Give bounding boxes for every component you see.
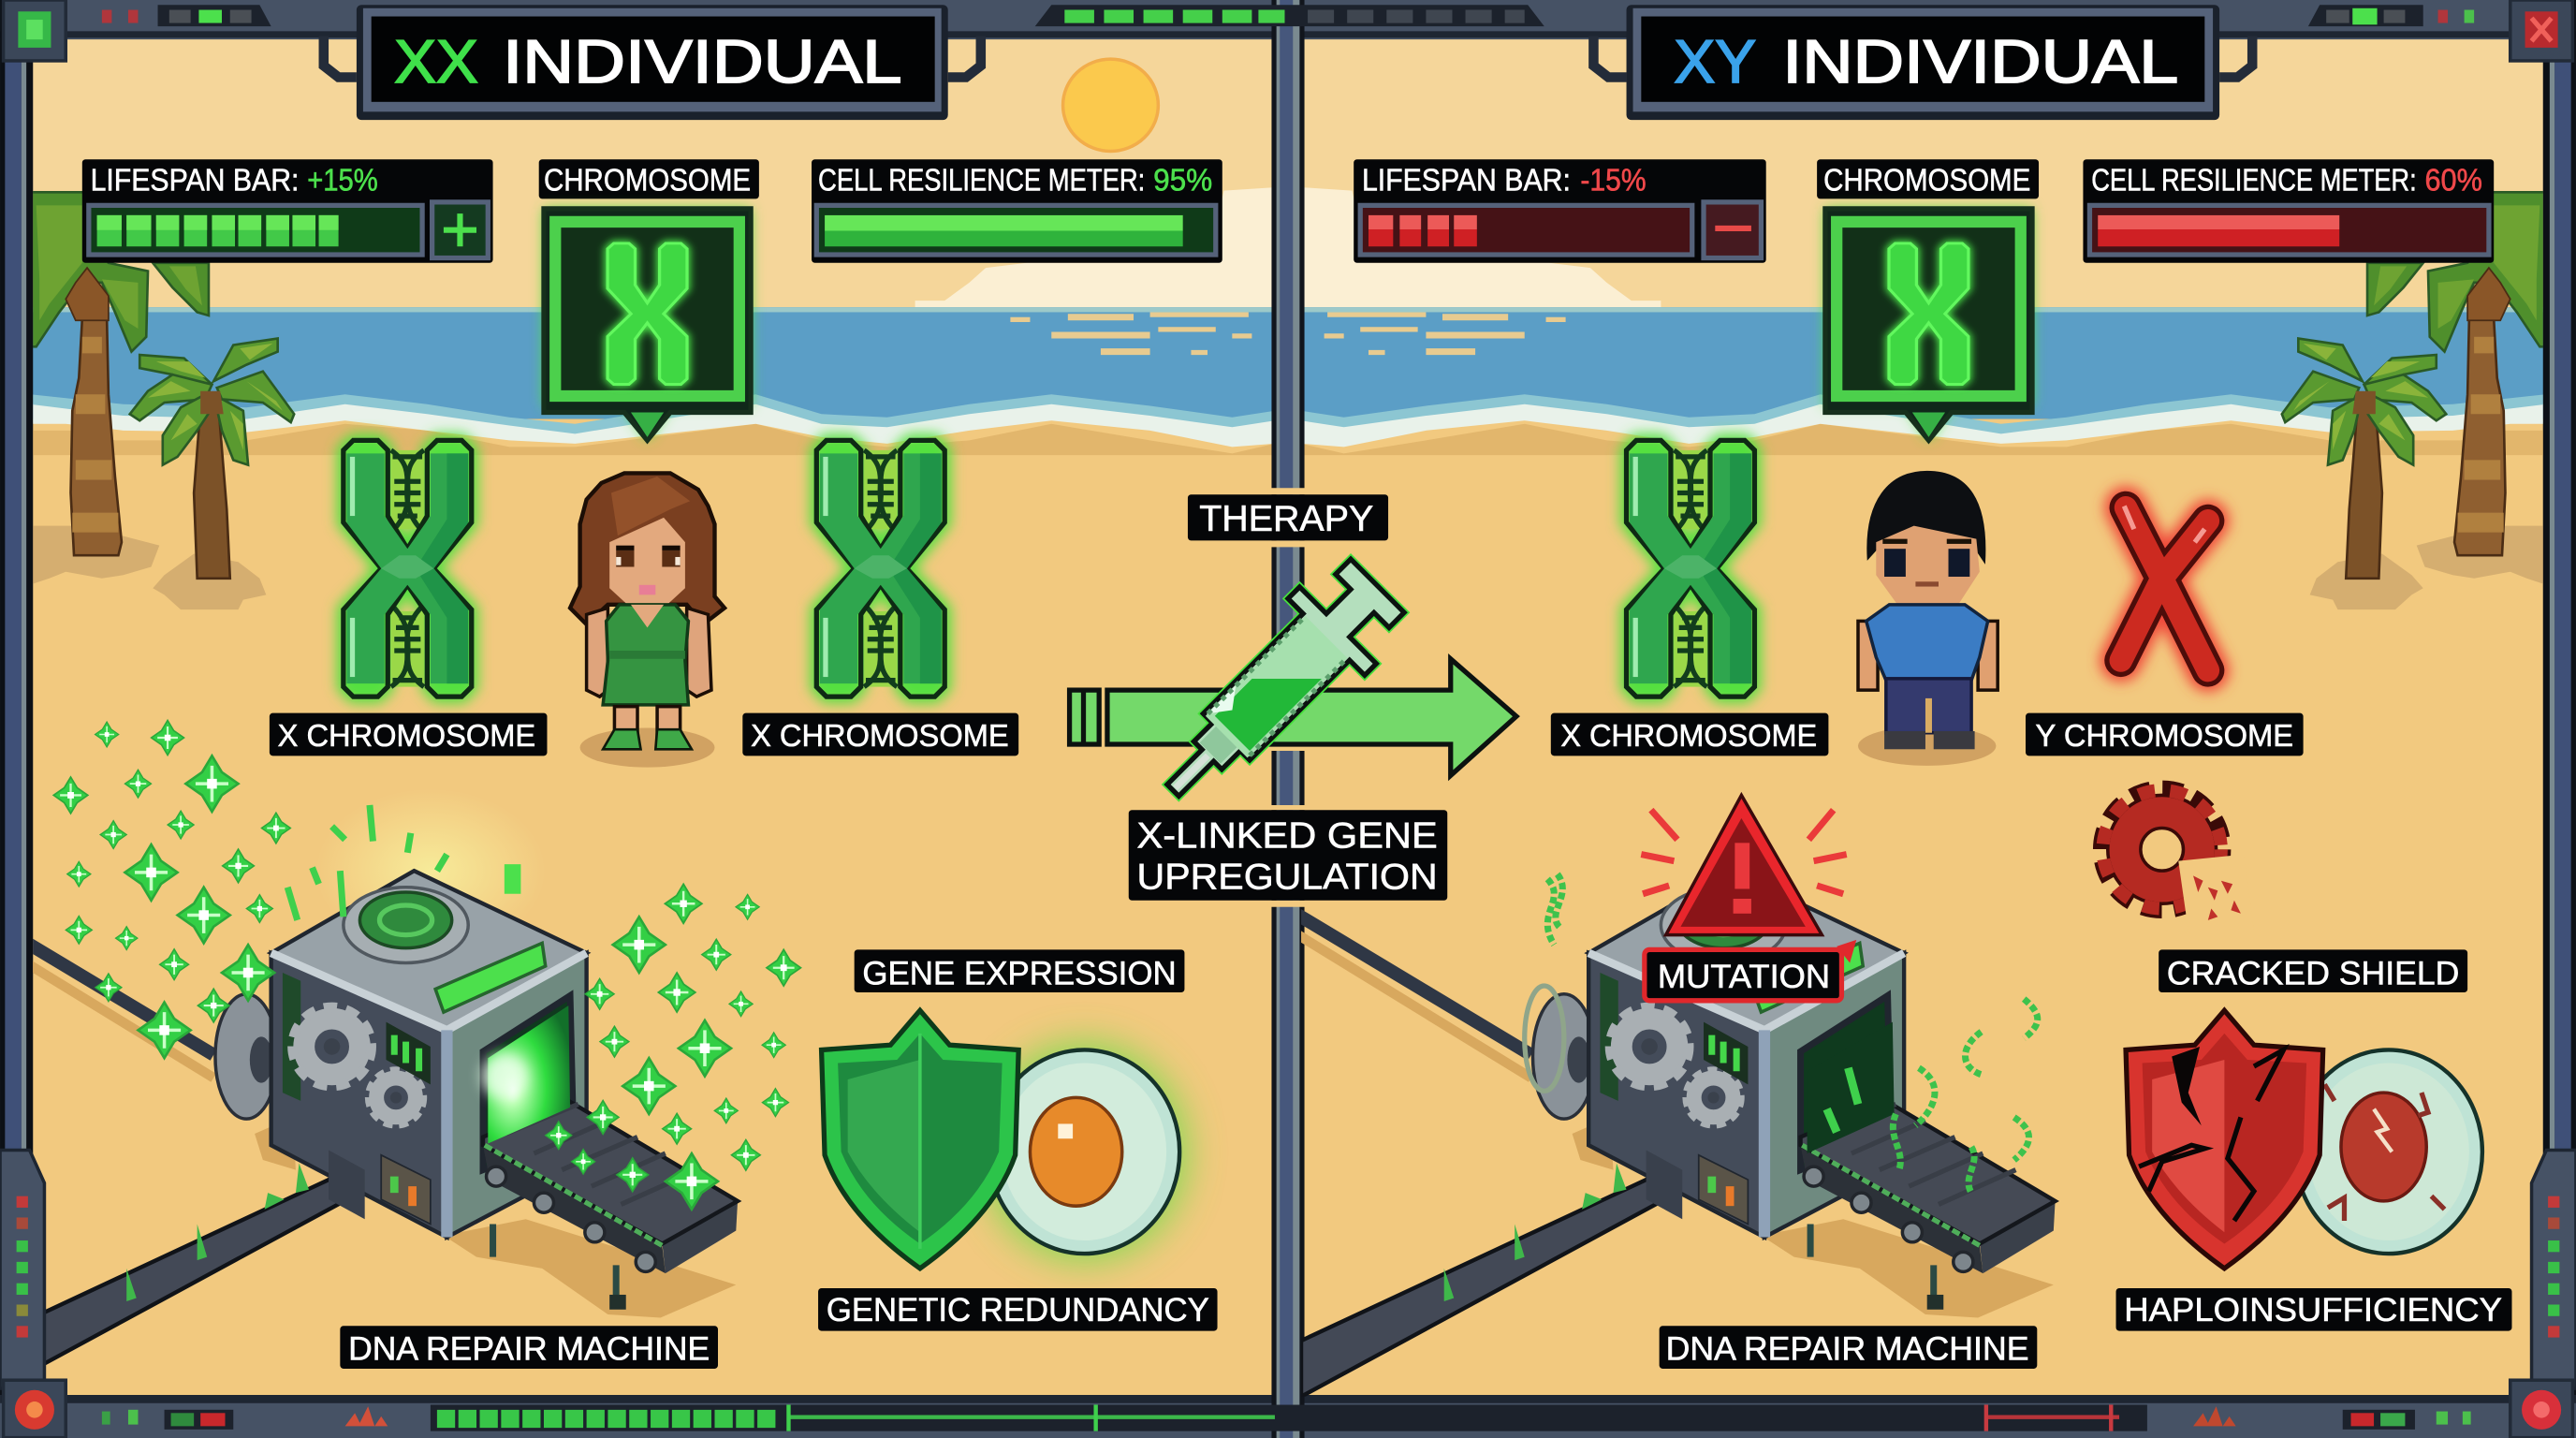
labels: chromosomes row: X CHROMOSOME: [751, 719, 1009, 754]
label: therapy: THERAPY: [1199, 499, 1373, 539]
label: mutation: MUTATION: [1658, 959, 1830, 995]
label: DNA repair machine left: DNA REPAIR MACHINE: [348, 1330, 710, 1367]
arrow: therapy direction: [1070, 659, 1516, 775]
title: XY individual: [1593, 5, 2252, 120]
icon: X chromosome left: [344, 440, 472, 697]
title: XX individual: XX: [394, 27, 478, 95]
panel: XY lifespan bar: [1354, 159, 1766, 263]
top left indicators: [102, 5, 271, 26]
sparkles: green repaired genes: [53, 721, 800, 1210]
icon: X chromosome, XY side: [1627, 440, 1754, 697]
icon: warning triangle: [1641, 795, 1847, 935]
label: X-linked gene upregulation: X-LINKED GENE: [1137, 816, 1438, 857]
divider gaps around centre labels: [1268, 488, 1308, 907]
panel: XX cell resilience meter: [812, 159, 1222, 263]
label: X-linked gene upregulation: UPREGULATION: [1137, 857, 1438, 897]
icon: cell with healthy nucleus: [983, 1043, 1186, 1260]
corner light: top right: [2510, 0, 2572, 61]
title: XY individual: XY: [1674, 27, 1756, 95]
corner light: bottom right: [2510, 1380, 2572, 1438]
sun: [1063, 59, 1158, 151]
character: XY man: [1858, 472, 1998, 766]
icon: chromosome callout, XX: [544, 209, 751, 440]
bottom left indicators: [102, 1406, 388, 1430]
icon: damaged red Y chromosome: [2121, 506, 2208, 670]
panel: XY cell resilience meter: 60%: [2424, 164, 2482, 198]
corner light: top left: [4, 0, 66, 61]
beach: right panel: [1301, 37, 2546, 1405]
panel: XY cell resilience meter: CELL RESILIENCE METER:: [2091, 164, 2417, 198]
panel: XY lifespan bar: LIFESPAN BAR:: [1362, 164, 1571, 198]
bottom right indicators: [2193, 1406, 2471, 1430]
illustration: XX DNA repair machine: [33, 805, 741, 1365]
panel: XY lifespan bar: -15%: [1580, 164, 1647, 198]
labels: chromosomes row: X CHROMOSOME: [278, 719, 535, 754]
icon: damaged cell: [2295, 1049, 2482, 1254]
label: cracked shield: CRACKED SHIELD: [2167, 955, 2459, 991]
icon: syringe: [1134, 548, 1416, 829]
panel: XX lifespan bar: +15%: [307, 164, 378, 198]
title: XX individual: INDIVIDUAL: [503, 27, 902, 95]
panel: XX cell resilience meter: CELL RESILIENCE METER:: [818, 164, 1145, 198]
panel: XX lifespan bar: LIFESPAN BAR:: [91, 164, 299, 198]
side module: right rail with status lights: [2532, 1151, 2576, 1388]
beach: left panel: [30, 37, 1275, 1405]
label: chromosome, XY: CHROMOSOME: [1823, 164, 2030, 198]
icon: X chromosome right: [816, 440, 944, 697]
corner light: bottom left: [4, 1380, 66, 1438]
icon: chromosome callout, XY: [1825, 209, 2032, 440]
labels: chromosomes row: [270, 713, 2304, 756]
panel: XX cell resilience meter: 95%: [1153, 164, 1212, 198]
panel: XX lifespan bar: [82, 159, 493, 263]
icon: green shield: [822, 1010, 1018, 1269]
squiggles: failing gene fragments: [1547, 874, 2038, 1193]
title: XX individual: [324, 5, 981, 120]
top right indicators: [2308, 5, 2474, 26]
side module: left rail with status lights: [0, 1151, 44, 1388]
labels: chromosomes row: X CHROMOSOME: [1560, 719, 1817, 754]
title: XY individual: INDIVIDUAL: [1782, 27, 2178, 95]
icon: cracked gear: [2101, 788, 2254, 930]
bottom progress strip: [431, 1405, 2147, 1431]
icon: cracked red shield: [2126, 1010, 2323, 1269]
label: haploinsufficiency: HAPLOINSUFFICIENCY: [2124, 1292, 2502, 1328]
character: XX woman: [570, 473, 724, 768]
label: mutation: [1645, 940, 1856, 1001]
labels: chromosomes row: Y CHROMOSOME: [2036, 719, 2293, 754]
label: chromosome, XX: CHROMOSOME: [544, 164, 751, 198]
illustration: XY DNA repair machine: [1284, 871, 2056, 1397]
top centre progress strip: [1035, 5, 1544, 26]
label: genetic redundancy: GENETIC REDUNDANCY: [827, 1292, 1209, 1328]
label: X-linked gene upregulation: [1129, 810, 1447, 901]
label: gene expression: GENE EXPRESSION: [862, 955, 1177, 991]
label: DNA repair machine right: DNA REPAIR MACHINE: [1666, 1330, 2029, 1367]
panel: XY cell resilience meter: [2083, 159, 2494, 263]
